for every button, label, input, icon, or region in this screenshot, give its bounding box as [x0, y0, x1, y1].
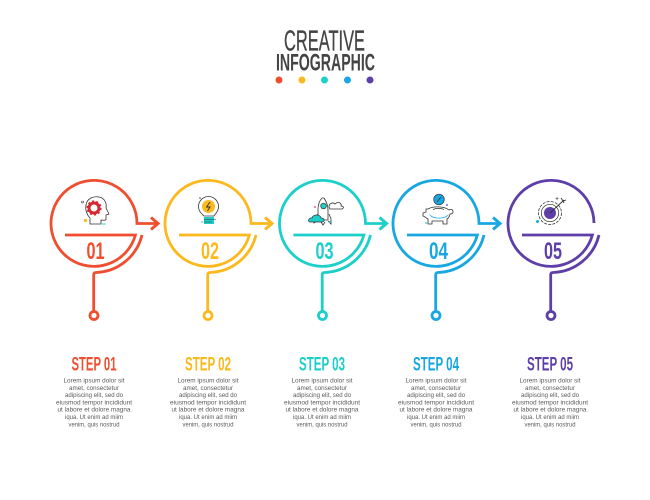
step 2 text: iqua. Ut enim ad miim: [179, 414, 237, 421]
step 4 text: eiusmod tempor incididunt: [398, 399, 474, 406]
title colour dots: [276, 76, 374, 84]
step 1 text: eiusmod tempor incididunt: [56, 399, 132, 406]
step 2 text: venim, quis nostrud: [182, 421, 234, 428]
ring with arrow: [280, 180, 386, 320]
step 5 text: [512, 354, 588, 428]
step 1 text: Lorem ipsum dolor sit: [64, 378, 125, 384]
step 4 text: STEP 04: [413, 354, 459, 376]
icon: target with arrow: [536, 197, 566, 224]
step 3 text: STEP 03: [299, 354, 345, 376]
step 2 node: [165, 180, 272, 320]
step 2 text: adipiscing elit, sed do: [179, 392, 237, 399]
step 1 text: venim, quis nostrud: [68, 421, 120, 428]
step 1 text: ut labore et dolore magna: [58, 407, 131, 414]
step 4 text: ut labore et dolore magna: [400, 407, 473, 414]
icon: light bulb: [198, 196, 218, 224]
step 2 text: Lorem ipsum dolor sit: [178, 378, 239, 384]
step 5 text: venim, quis nostrud: [524, 421, 576, 428]
ring with arrow: [51, 180, 158, 320]
step 1 node: [51, 180, 158, 320]
ring with arrow: [165, 180, 272, 320]
step 3 text: amet, consectetur: [297, 385, 348, 392]
step 1 text: STEP 01: [72, 354, 117, 376]
step 3 text: adipiscing elit, sed do: [293, 392, 351, 399]
step 5 text: iqua. Ut enim ad miim: [521, 414, 579, 421]
step 4 text: iqua. Ut enim ad miim: [407, 414, 465, 421]
step 3 text: [284, 354, 360, 428]
step 4 text: adipiscing elit, sed do: [407, 392, 465, 399]
step 2 text: STEP 02: [185, 354, 231, 376]
step 5 text: amet, consectetur: [525, 385, 576, 392]
step 1 text: [56, 354, 132, 428]
step 1 text: iqua. Ut enim ad miim: [65, 414, 123, 421]
step 5 text: adipiscing elit, sed do: [521, 392, 579, 399]
number 02: 02: [201, 238, 219, 265]
icon: piggy bank with coin: [423, 194, 453, 224]
step 4 node: [393, 180, 500, 320]
step 3 text: ut labore et dolore magna: [286, 407, 359, 414]
step 4 text: Lorem ipsum dolor sit: [406, 378, 467, 384]
number 05: 05: [544, 238, 562, 265]
step 2 text: amet, consectetur: [183, 385, 234, 392]
ring with arrow: [393, 180, 500, 320]
number 01: 01: [86, 238, 104, 265]
icon: rocket and clouds: [309, 198, 343, 225]
title: INFOGRAPHIC: [276, 50, 375, 76]
icon: head with gear: [82, 197, 109, 224]
step 1 text: adipiscing elit, sed do: [65, 392, 123, 399]
step 2 text: [170, 354, 246, 428]
step 5 text: eiusmod tempor incididunt: [512, 399, 588, 406]
step 3 node: [280, 180, 386, 320]
step 1 text: amet, consectetur: [69, 385, 120, 392]
step 5 node: [508, 180, 599, 320]
step 3 text: venim, quis nostrud: [296, 421, 348, 428]
step 3 text: iqua. Ut enim ad miim: [293, 414, 351, 421]
step 2 text: ut labore et dolore magna: [172, 407, 245, 414]
step 4 text: [398, 354, 474, 428]
ring without arrow: [508, 180, 599, 320]
number 03: 03: [316, 238, 334, 265]
step 3 text: Lorem ipsum dolor sit: [292, 378, 353, 384]
number 04: 04: [429, 238, 448, 265]
step 2 text: eiusmod tempor incididunt: [170, 399, 246, 406]
step 4 text: amet, consectetur: [411, 385, 462, 392]
title: CREATIVE: [284, 26, 365, 58]
step 4 text: venim, quis nostrud: [410, 421, 462, 428]
step 3 text: eiusmod tempor incididunt: [284, 399, 360, 406]
title: [276, 26, 375, 76]
step 5 text: Lorem ipsum dolor sit: [520, 378, 581, 384]
step 5 text: STEP 05: [527, 354, 573, 376]
step 5 text: ut labore et dolore magna: [514, 407, 587, 414]
